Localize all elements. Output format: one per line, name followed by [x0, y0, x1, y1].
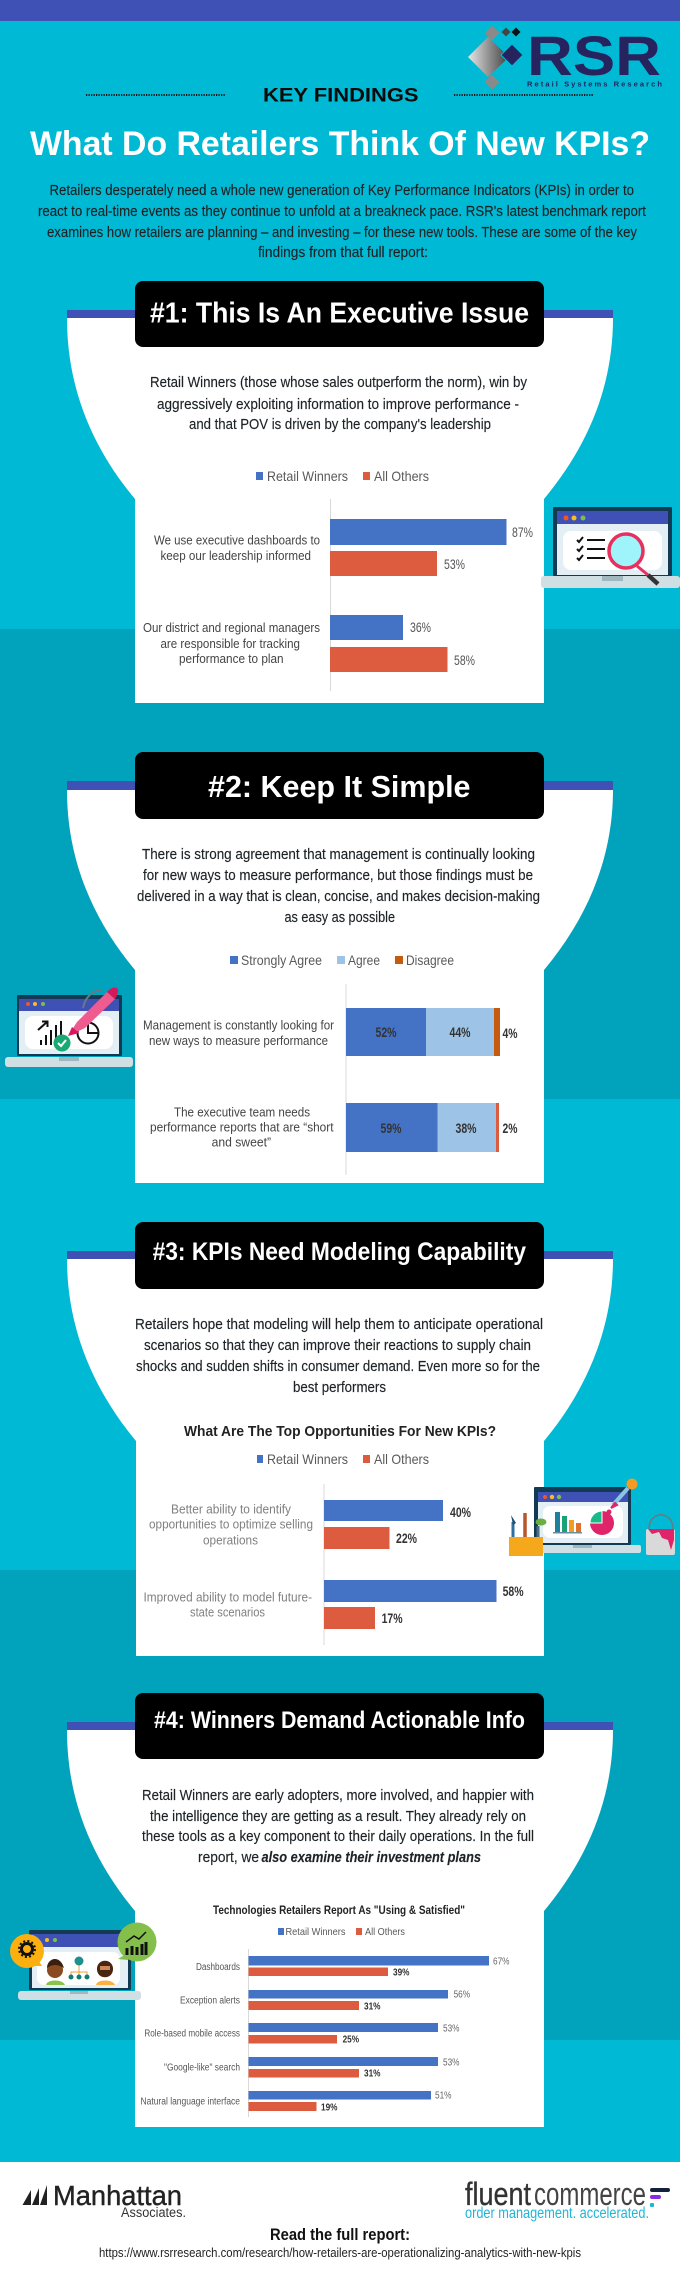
heading: finding 1: [135, 281, 544, 347]
bar chart: finding 4: Dashboards: [196, 1962, 240, 1973]
bar chart: finding 1: 36%: [410, 619, 431, 635]
text: finding 2 description: There is strong agreement that management is continually looking: [142, 846, 535, 863]
bar chart: finding 4: 67%: [493, 1956, 510, 1968]
bar chart: finding 1: We use executive dashboards to: [154, 532, 320, 548]
logo: Manhattan Associates: Manhattan: [53, 2180, 182, 2211]
text: finding 3 description: scenarios so that they can improve their reactions to supply chain: [144, 1337, 531, 1354]
panel: finding 2: [67, 752, 613, 1183]
bar chart: finding 3: 22%: [396, 1531, 417, 1546]
heading: finding 3: [135, 1222, 544, 1289]
panel: finding 3: [67, 1222, 613, 1656]
panel shape: [67, 1730, 613, 2127]
bar chart: finding 4: "Google-like" search: [164, 2062, 240, 2074]
footer: sponsor logos and link: [22, 2176, 670, 2260]
logo: RSR Retail Systems Research: RSR: [527, 24, 661, 87]
logo: Manhattan Associates: Associates.: [121, 2205, 186, 2220]
panel shape: [67, 318, 613, 703]
text: finding 3 description: best performers: [293, 1379, 386, 1396]
legend: Retail Winners: [267, 468, 348, 484]
icon: laptop with charts and pen: [5, 988, 133, 1067]
stacked bar chart: finding 2: Management is constantly looking for: [143, 1018, 335, 1032]
text: finding 4 description: also examine their investment plans: [262, 1849, 481, 1866]
bar chart: finding 4: 53%: [443, 2058, 460, 2068]
heading: finding 2: #2: Keep It Simple: [208, 769, 470, 804]
bar chart: finding 3: Better ability to identify: [171, 1502, 291, 1516]
title: What Do Retailers Think Of New KPIs?: [30, 125, 650, 163]
stacked bar chart: finding 2: The executive team needs: [174, 1104, 310, 1120]
bar chart: finding 3: [144, 1484, 524, 1645]
legend: All Others: [374, 468, 429, 484]
heading: finding 1: #1: This Is An Executive Issue: [150, 298, 529, 330]
bar chart: finding 4: Role-based mobile access: [144, 2028, 240, 2040]
logo: fluent commerce: fluent: [465, 2176, 531, 2212]
stacked bar chart: finding 2: [143, 984, 518, 1175]
bar chart: finding 4: 31%: [364, 2068, 381, 2080]
bar chart: finding 3: 40%: [450, 1505, 471, 1520]
legend: Agree: [348, 952, 380, 968]
bar chart: finding 4: 39%: [393, 1968, 410, 1978]
bar chart: finding 3: state scenarios: [190, 1604, 265, 1620]
bar chart: finding 4: Natural language interface: [140, 2096, 240, 2108]
panel: finding 4: [67, 1693, 613, 2127]
bar chart: finding 4: [140, 1949, 510, 2117]
bar chart: finding 1: 87%: [512, 524, 533, 540]
stacked bar chart: finding 2: 44%: [450, 1025, 470, 1040]
bar chart: finding 4: 19%: [321, 2102, 338, 2114]
logo: fluent commerce: commerce: [534, 2176, 646, 2212]
stacked bar chart: finding 2: 2%: [502, 1121, 518, 1136]
legend: Disagree: [406, 952, 454, 968]
bar chart: finding 1: 53%: [444, 556, 465, 572]
logo: fluent commerce: [465, 2176, 670, 2222]
text: finding 4 description: Retail Winners are early adopters, more involved, and happier with: [142, 1787, 534, 1804]
bar chart: finding 3: Improved ability to model future-: [144, 1590, 312, 1604]
panel: finding 1: [67, 281, 613, 703]
bar chart: finding 3: opportunities to optimize selling: [149, 1516, 313, 1532]
text: finding 3 description: Retailers hope that modeling will help them to anticipate operational: [135, 1316, 543, 1333]
text: finding 4 description: report, we: [198, 1849, 259, 1866]
stacked bar chart: finding 2: 52%: [376, 1025, 396, 1040]
bar chart: finding 3: 17%: [382, 1611, 403, 1626]
logo: Manhattan Associates: [22, 2180, 186, 2220]
stacked bar chart: finding 2: new ways to measure performance: [149, 1033, 328, 1048]
logo: RSR Retail Systems Research: Retail Systems Research: [527, 80, 662, 88]
intro text: [38, 182, 647, 261]
bar chart: finding 1: Our district and regional managers: [143, 620, 320, 635]
legend: [256, 468, 429, 484]
legend: All Others: [374, 1451, 429, 1467]
text: finding 1 description: Retail Winners (those whose sales outperform the norm), win by: [150, 374, 527, 391]
text: finding 3 description: shocks and sudden shifts in consumer demand. Even more so for the: [136, 1358, 540, 1375]
legend: [278, 1926, 405, 1938]
bar chart: finding 4: 51%: [435, 2090, 452, 2102]
icon: laptop with paint tools: [509, 1478, 675, 1556]
legend: Retail Winners: [267, 1451, 348, 1467]
heading: finding 2: [135, 752, 544, 819]
text: finding 4 description: the intelligence they are getting as a result. They already rely on: [150, 1808, 526, 1825]
stacked bar chart: finding 2: 38%: [456, 1121, 476, 1136]
legend: Strongly Agree: [241, 952, 322, 968]
chart title: finding 3: What Are The Top Opportunities For New KPIs?: [184, 1423, 496, 1440]
panel shape: [67, 1259, 613, 1656]
bar chart: finding 1: 58%: [454, 652, 475, 668]
text: finding 2 description: as easy as possible: [284, 909, 395, 926]
text: finding 2 description: delivered in a way that is clean, concise, and makes decision-making: [137, 888, 540, 905]
text: finding 2 description: [137, 846, 540, 926]
bar chart: finding 4: 31%: [364, 2002, 381, 2012]
legend: [230, 952, 454, 968]
bar chart: finding 4: 53%: [443, 2024, 460, 2034]
heading: key findings: KEY FINDINGS: [263, 86, 418, 107]
bar chart: finding 1: performance to plan: [179, 651, 284, 666]
call to action: read the full report: Read the full report:: [270, 2225, 410, 2244]
text: finding 4 description: [142, 1787, 534, 1866]
text: finding 2 description: for new ways to measure performance, but those findings must be: [143, 867, 533, 884]
bar chart: finding 4: 56%: [454, 1990, 470, 2000]
bar chart: finding 1: keep our leadership informed: [160, 548, 311, 563]
icon: laptop with team and speech bubbles: [10, 1922, 156, 2000]
stacked bar chart: finding 2: 59%: [380, 1121, 402, 1136]
chart title: finding 4: Technologies Retailers Report As "Using & Satisfied": [213, 1905, 465, 1917]
icon: laptop with checklist and magnifier: [541, 507, 680, 588]
legend: All Others: [365, 1926, 405, 1938]
text: finding 3 description: [135, 1316, 543, 1396]
link: report url: https://www.rsrresearch.com/research/how-retailers-are-operationalizing-analytics-with-new-kpis: [99, 2245, 581, 2260]
text: finding 1 description: aggressively exploiting information to improve performance -: [157, 396, 519, 413]
logo: RSR Retail Systems Research: [468, 24, 662, 90]
heading: finding 4: [135, 1693, 544, 1759]
heading: finding 3: #3: KPIs Need Modeling Capability: [153, 1238, 526, 1266]
bar chart: finding 1: are responsible for tracking: [160, 636, 300, 651]
bar chart: finding 4: 25%: [343, 2034, 359, 2046]
bar chart: finding 4: Exception alerts: [180, 1996, 240, 2006]
intro text: findings from that full report:: [258, 244, 428, 261]
stacked bar chart: finding 2: performance reports that are “short: [150, 1120, 334, 1134]
text: finding 1 description: [150, 374, 527, 433]
stacked bar chart: finding 2: 4%: [502, 1026, 518, 1041]
legend: Retail Winners: [286, 1926, 346, 1938]
stacked bar chart: finding 2: and sweet”: [212, 1134, 271, 1150]
text: finding 1 description: and that POV is driven by the company's leadership: [189, 416, 491, 433]
bar chart: finding 3: 58%: [503, 1584, 524, 1599]
text: finding 4 description: these tools as a key component to their daily operations. In the full: [142, 1828, 534, 1845]
panel shape: [67, 790, 613, 1183]
heading: finding 4: #4: Winners Demand Actionable Info: [154, 1707, 525, 1734]
bar chart: finding 1: [143, 499, 533, 691]
legend: [257, 1451, 429, 1467]
bar chart: finding 3: operations: [203, 1532, 258, 1548]
